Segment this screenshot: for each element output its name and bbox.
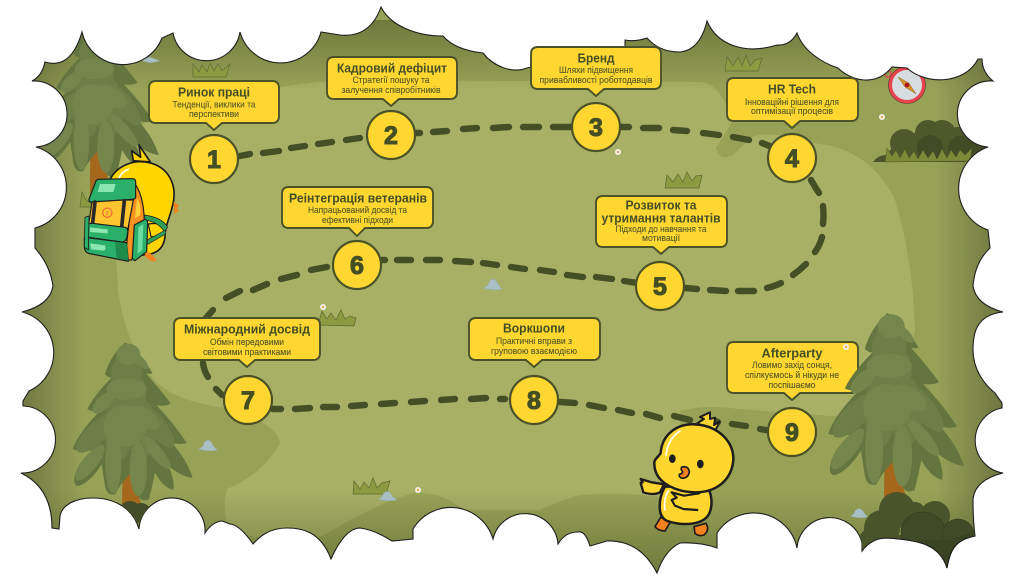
rocks — [140, 57, 868, 518]
callout 9 — [727, 342, 858, 400]
callout 4: Інноваційні рішення для — [745, 97, 839, 107]
character: pointing duck — [641, 412, 733, 536]
number 1: 1 — [207, 146, 221, 174]
callout 5: Розвиток та — [626, 198, 697, 212]
step 5 — [596, 196, 727, 310]
callout 6: Напрацьований досвід та — [308, 205, 407, 215]
number 5: 5 — [653, 273, 667, 301]
body — [660, 487, 712, 524]
character: duck with backpack — [84, 145, 179, 261]
callout 9: Ловимо захід сонця, — [752, 360, 832, 370]
feet — [655, 517, 671, 531]
eyes — [669, 454, 676, 463]
backpack flap — [89, 179, 136, 202]
number 6: 6 — [350, 252, 364, 280]
step 7 — [174, 318, 320, 424]
callout 2: залучення співробітників — [342, 85, 441, 95]
callout 9: поспішаємо — [768, 380, 816, 390]
callout 1 — [149, 81, 279, 130]
tree: top left — [45, 36, 159, 195]
front pocket — [85, 223, 128, 242]
callout 3 — [531, 47, 661, 96]
beak — [174, 202, 179, 214]
dashed route — [203, 127, 824, 430]
callout 2: Кадровий дефіцит — [337, 60, 447, 76]
arm right — [672, 492, 699, 510]
lower trees and bushes — [71, 313, 975, 570]
callout 7: світовими практиками — [203, 347, 291, 357]
step 8 — [469, 318, 600, 424]
bottom outline — [862, 536, 975, 568]
callout 8: Практичні вправи з — [496, 336, 572, 346]
callout 3: Бренд — [578, 50, 615, 66]
callout 5: мотивації — [642, 233, 681, 243]
callout 1: Ринок праці — [178, 84, 250, 100]
number 7: 7 — [241, 387, 255, 415]
icon: compass — [885, 66, 926, 104]
backpack side orange — [125, 182, 144, 260]
number 6 — [333, 241, 381, 289]
side pocket — [132, 219, 148, 261]
callout 9: Afterparty — [762, 346, 823, 360]
bush: top right — [873, 120, 990, 162]
beak — [679, 467, 689, 478]
callout 7: Обмін передовими — [210, 337, 284, 347]
step 4 — [727, 78, 858, 182]
callout 7 — [174, 318, 320, 367]
arm — [148, 223, 166, 237]
step 3 — [531, 47, 661, 151]
number 9: 9 — [785, 419, 799, 447]
callout 4: HR Tech — [768, 82, 816, 96]
edge shading — [44, 20, 982, 76]
body — [108, 162, 174, 255]
callout 7: Міжнародний досвід — [184, 322, 311, 336]
callout 8: груповою взаємодією — [491, 346, 577, 356]
step 6 — [282, 187, 433, 289]
number 4: 4 — [785, 145, 799, 173]
callout 6: ефективні підходи — [322, 215, 393, 225]
flowers — [320, 114, 885, 493]
head — [654, 424, 733, 492]
step 1 — [149, 81, 279, 183]
foot — [144, 252, 157, 261]
number 7 — [224, 376, 272, 424]
callout 5 — [596, 196, 727, 254]
callout 8: Воркшопи — [503, 320, 565, 336]
callout 3: привабливості роботодавців — [540, 75, 653, 85]
backpack main panel — [88, 200, 133, 230]
callout 5: Підходи до навчання та — [616, 224, 707, 234]
number 3: 3 — [589, 114, 603, 142]
callout 2 — [327, 57, 457, 106]
callout 1: Тенденції, виклики та — [172, 100, 256, 110]
tree: bottom right — [826, 313, 964, 498]
callout 6 — [282, 187, 433, 236]
flower on callout 9 — [843, 344, 849, 350]
crest — [132, 145, 150, 162]
callout 5: утримання талантів — [602, 210, 721, 226]
callout 9: спілкуємось й нікуди не — [745, 370, 839, 380]
light meadow — [114, 80, 915, 545]
callout 6: Реінтеграція ветеранів — [289, 190, 427, 206]
arm left — [641, 479, 664, 494]
callout 8 — [469, 318, 600, 367]
straps — [92, 201, 124, 227]
number 8: 8 — [527, 387, 541, 415]
bush: tree base left — [122, 501, 149, 523]
logo: r — [106, 210, 109, 217]
number 2: 2 — [384, 122, 398, 150]
step 9 — [727, 342, 858, 456]
callout 4: оптимізації процесів — [751, 106, 833, 116]
callout 3: Шляхи підвищення — [559, 65, 633, 75]
bush: bottom right — [859, 492, 975, 570]
callout 4 — [727, 78, 858, 128]
callout 2: Стратегії пошуку та — [352, 75, 430, 85]
tree: bottom left — [71, 343, 193, 506]
callout 1: перспективи — [189, 109, 239, 119]
grass tufts — [80, 55, 762, 494]
step 2 — [327, 57, 457, 159]
head crest — [697, 412, 719, 432]
